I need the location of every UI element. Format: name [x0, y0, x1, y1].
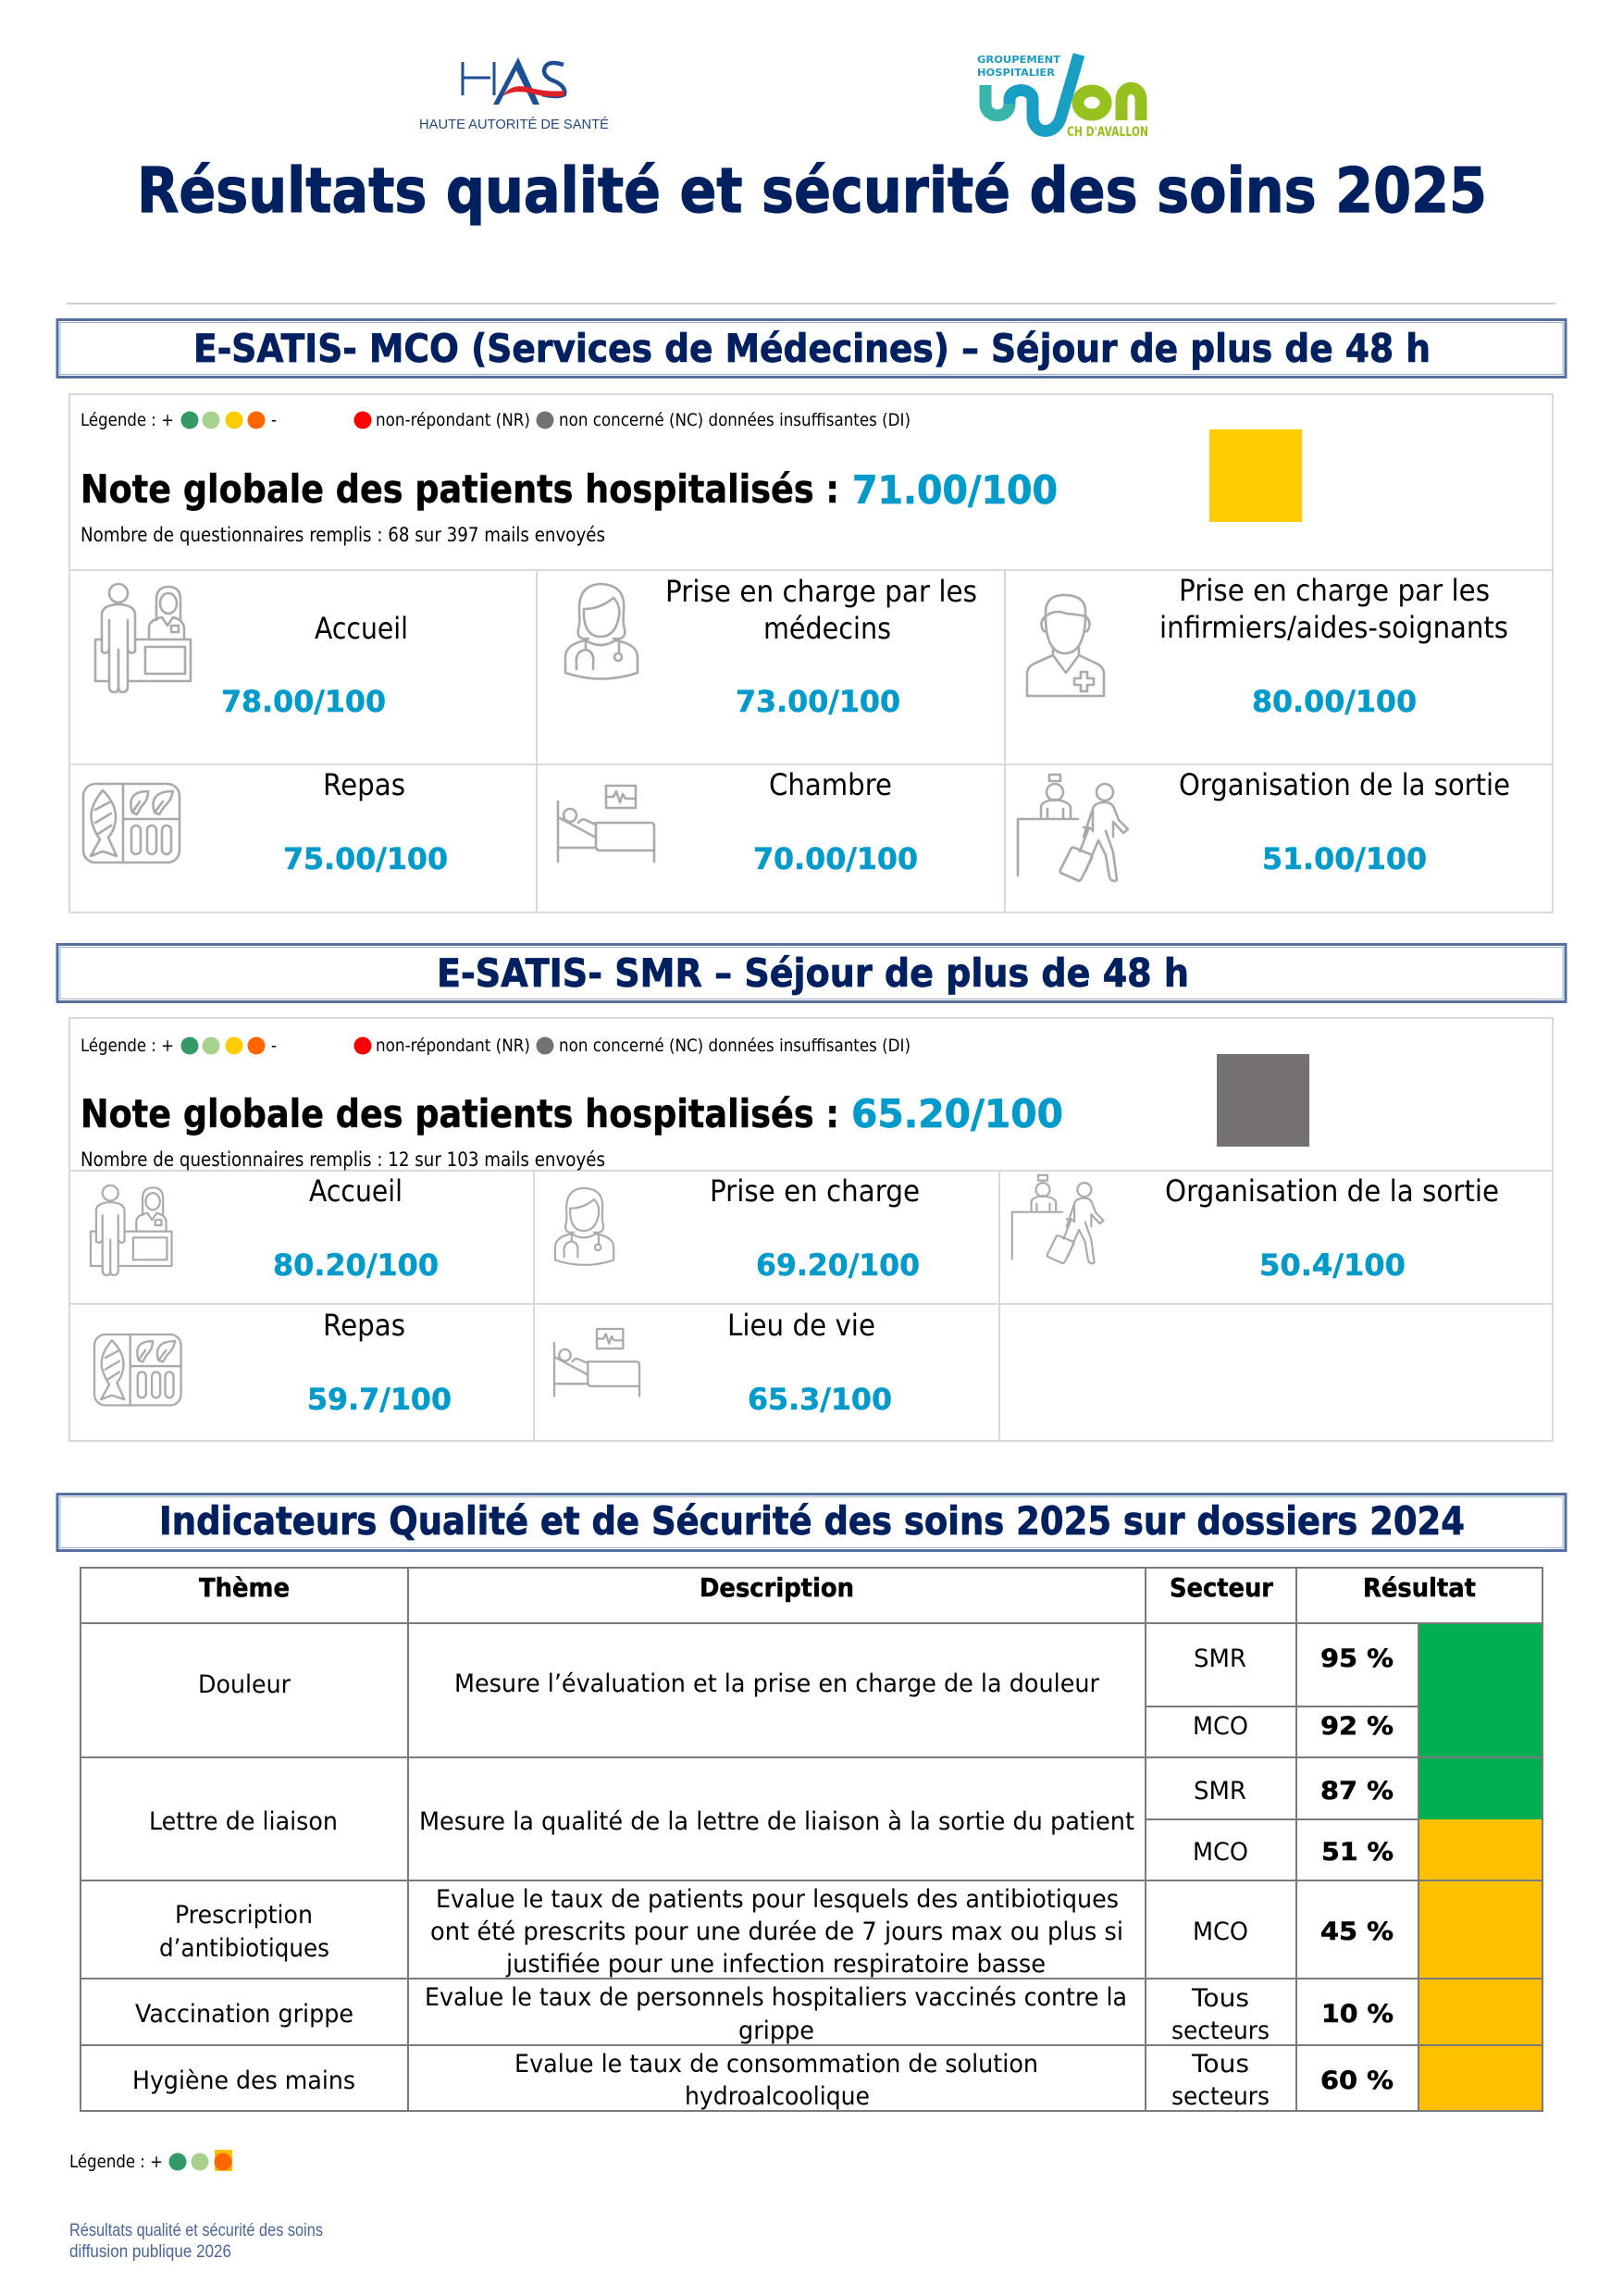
global score SMR: Note globale des patients hospitalisés : [81, 1091, 839, 1136]
logo: HAS [419, 57, 609, 132]
table: indicateurs [81, 1568, 1542, 2111]
cell: Organisation de la sortie SMR [1012, 1173, 1499, 1283]
row: Douleur: Douleur [198, 1670, 291, 1699]
row: Lettre de liaison [149, 1777, 1394, 1867]
row: Vaccination grippe [135, 1983, 1394, 2045]
legend MCO: Légende : + [81, 410, 174, 430]
row: Douleur: 95 % [1320, 1644, 1394, 1673]
row: Douleur: SMR [1194, 1644, 1246, 1673]
section heading: E-SATIS SMR [57, 944, 1566, 1001]
row: Prescription d'antibiotiques: d’antibiotiques [159, 1934, 329, 1963]
cell: Repas SMR: 59.7/100 [307, 1382, 452, 1417]
row: Vaccination grippe: 10 % [1321, 2000, 1394, 2029]
row: Hygiène des mains: Evalue le taux de consommation de solution [514, 2050, 1038, 2079]
cell: Prise en charge SMR: Prise en charge [710, 1173, 920, 1209]
row: Lettre de liaison: Mesure la qualité de la lettre de liaison à la sortie du patient [419, 1807, 1134, 1836]
cell: Lieu de vie SMR: 65.3/100 [748, 1382, 892, 1417]
row: Douleur: 92 % [1320, 1712, 1394, 1741]
row: Prescription d'antibiotiques: ont été prescrits pour une durée de 7 jours max ou plus si [430, 1917, 1123, 1946]
row: Hygiène des mains [132, 2050, 1394, 2111]
row: Lettre de liaison: 87 % [1320, 1777, 1394, 1806]
row: Lettre de liaison: SMR [1194, 1777, 1246, 1806]
score colour square: grey [1217, 1054, 1309, 1147]
cell: Accueil: Accueil [315, 611, 408, 646]
row: Prescription d'antibiotiques: justifiée pour une infection respiratoire basse [505, 1950, 1046, 1979]
cell: Chambre [558, 767, 918, 876]
table header: Résultat [1363, 1572, 1476, 1603]
legend SMR: non concerné (NC) données insuffisantes (DI) [559, 1036, 911, 1056]
row: Prescription d'antibiotiques [159, 1885, 1394, 1979]
cell: Chambre: 70.00/100 [753, 841, 918, 876]
row: Hygiène des mains: secteurs [1171, 2082, 1270, 2111]
legend MCO: non-répondant (NR) [376, 410, 530, 430]
row: Vaccination grippe: Vaccination grippe [135, 2000, 353, 2029]
cell: Organisation de la sortie SMR: 50.4/100 [1259, 1247, 1406, 1283]
cell: Accueil SMR [91, 1173, 439, 1283]
cell: Repas [83, 767, 448, 876]
section heading: E-SATIS MCO: E-SATIS- MCO (Services de Médecines) – Séjour de plus de 48 h [193, 326, 1431, 371]
cell: Accueil SMR: 80.20/100 [273, 1247, 439, 1283]
cell: médecins: médecins [763, 611, 891, 646]
table header [199, 1572, 1476, 1603]
legend MCO: non concerné (NC) données insuffisantes (DI) [559, 410, 911, 430]
row: Douleur: Mesure l’évaluation et la prise en charge de la douleur [454, 1669, 1100, 1698]
cell: Organisation de la sortie SMR: Organisation de la sortie [1165, 1173, 1499, 1209]
legend SMR: non-répondant (NR) [376, 1036, 530, 1056]
cell: Accueil: 78.00/100 [221, 684, 386, 719]
row: Lettre de liaison: 51 % [1321, 1838, 1394, 1867]
questionnaires count MCO: Nombre de questionnaires remplis : 68 sur 397 mails envoyés [81, 524, 605, 547]
row: Hygiène des mains: Tous [1191, 2050, 1249, 2079]
row: Vaccination grippe: secteurs [1171, 2017, 1270, 2045]
table header: Secteur [1170, 1572, 1273, 1603]
logo: GH Unyon: HOSPITALIER [977, 67, 1056, 79]
row: Vaccination grippe: Evalue le taux de personnels hospitaliers vaccinés contre la [425, 1983, 1127, 2012]
cell: Lieu de vie SMR: Lieu de vie [727, 1308, 875, 1343]
cell: Prise en charge SMR: 69.20/100 [756, 1247, 920, 1283]
cell: Repas SMR [94, 1308, 452, 1417]
cell: Organisation de la sortie [1018, 767, 1510, 881]
cell: Repas: 75.00/100 [283, 841, 448, 876]
logo: GH Unyon: CH D'AVALLON [1067, 125, 1148, 140]
row: Lettre de liaison: Lettre de liaison [149, 1807, 338, 1836]
cell: Accueil [95, 584, 408, 719]
cell: Repas SMR: Repas [323, 1308, 405, 1343]
logo: HAS: HAUTE AUTORITÉ DE SANTÉ [419, 117, 609, 132]
legend SMR: Légende : + [81, 1036, 174, 1056]
footer text: diffusion publique 2026 [69, 2242, 231, 2262]
section heading: Indicateurs: Indicateurs Qualité et de Sécurité des soins 2025 sur dossiers 2024 [159, 1498, 1465, 1544]
global score SMR: 65.20/100 [851, 1091, 1063, 1136]
table header: Description [700, 1572, 854, 1603]
cell: médecins: Prise en charge par les [665, 574, 977, 609]
cell: médecins [565, 574, 977, 719]
row: Hygiène des mains: hydroalcoolique [685, 2082, 870, 2111]
row: Vaccination grippe: grippe [738, 2017, 814, 2045]
cell: Organisation de la sortie: 51.00/100 [1262, 841, 1427, 876]
bottom legend: Légende : + [69, 2152, 163, 2172]
cell: infirmiers: 80.00/100 [1252, 684, 1417, 719]
cell: infirmiers: Prise en charge par les [1179, 573, 1490, 608]
section heading: E-SATIS SMR: E-SATIS- SMR – Séjour de plus de 48 h [437, 950, 1189, 996]
row: Vaccination grippe: Tous [1191, 1984, 1249, 2013]
global score MCO: 71.00/100 [852, 467, 1058, 513]
legend SMR [81, 1036, 911, 1056]
cell: Prise en charge SMR [555, 1173, 920, 1283]
cell: Repas: Repas [323, 767, 405, 802]
row: Prescription d'antibiotiques: MCO [1193, 1917, 1248, 1946]
result colour cells [1419, 1623, 1542, 2111]
logo: GH Unyon [977, 54, 1148, 140]
cell: Organisation de la sortie: Organisation de la sortie [1179, 767, 1510, 802]
legend MCO [81, 410, 911, 430]
score colour square: yellow [1209, 429, 1302, 522]
cell: infirmiers [1027, 573, 1508, 719]
cell: Accueil SMR: Accueil [309, 1173, 403, 1209]
row: Prescription d'antibiotiques: 45 % [1320, 1917, 1394, 1946]
cell: infirmiers: infirmiers/aides-soignants [1159, 610, 1508, 645]
global score MCO: Note globale des patients hospitalisés : [81, 466, 839, 512]
row: Prescription d'antibiotiques: Prescription [175, 1901, 313, 1930]
cell: Lieu de vie SMR [554, 1308, 892, 1417]
cell: médecins: 73.00/100 [736, 684, 900, 719]
questionnaires count SMR: Nombre de questionnaires remplis : 12 sur 103 mails envoyés [81, 1148, 605, 1172]
row: Prescription d'antibiotiques: Evalue le taux de patients pour lesquels des antibiotiques [436, 1885, 1119, 1914]
bottom legend [69, 2150, 232, 2172]
legend SMR: - [271, 1036, 277, 1056]
logo: GH Unyon: GROUPEMENT [977, 54, 1061, 66]
footer text [69, 2221, 323, 2262]
table header: Thème [199, 1572, 290, 1603]
cell: Chambre: Chambre [769, 767, 892, 802]
footer text: Résultats qualité et sécurité des soins [69, 2221, 323, 2240]
row: Hygiène des mains: Hygiène des mains [132, 2066, 355, 2095]
legend MCO: - [271, 410, 277, 430]
row: Douleur: MCO [1193, 1712, 1248, 1741]
panel: E-SATIS MCO [69, 394, 1553, 912]
panel: E-SATIS SMR [69, 1018, 1553, 1441]
row: Douleur [198, 1644, 1394, 1741]
row: Hygiène des mains: 60 % [1320, 2066, 1394, 2095]
row: Lettre de liaison: MCO [1193, 1838, 1248, 1867]
